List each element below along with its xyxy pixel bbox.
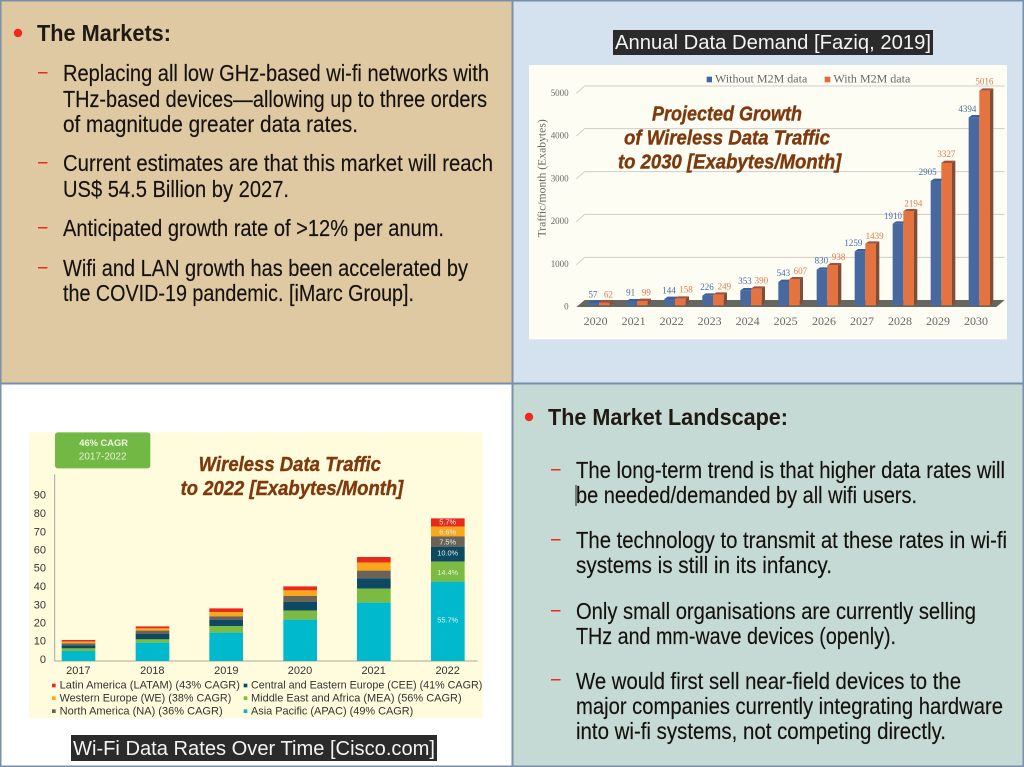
x axis labels: 2019 (214, 665, 239, 677)
percentage labels: 2022 bar: 7.5% (439, 537, 456, 546)
data labels: with M2M data: 1439 (866, 231, 884, 241)
x axis labels: 2021 (361, 665, 386, 677)
data labels: without M2M data: 4394 (958, 104, 977, 114)
bullet: the market landscape (525, 413, 533, 421)
percentage labels: 2022 bar: 10.0% (437, 549, 459, 558)
text block: landscape list: We would first sell near-field devices to the (576, 668, 961, 694)
x axis labels: 2023 (698, 314, 722, 328)
panel: wi-fi data rates (1, 384, 512, 766)
data labels: without M2M data: 830 (815, 256, 829, 266)
data labels: with M2M data: 158 (679, 285, 693, 295)
data labels: with M2M data: 607 (794, 266, 808, 276)
data labels: with M2M data: 938 (832, 252, 846, 262)
legend: Without M2M data (715, 74, 807, 86)
x axis labels: 2022 (660, 314, 684, 328)
caption: annual data demand: Annual Data Demand [Faziq, 2019] (615, 32, 931, 54)
y axis labels: 3000 (551, 173, 569, 183)
y axis labels: 80 (34, 508, 46, 520)
text block: market list: the COVID-19 pandemic. [iMarc Group]. (63, 280, 414, 306)
data labels: with M2M data: 62 (604, 289, 613, 299)
y axis labels: 1000 (551, 259, 569, 269)
badge: 46% CAGR: 2017-2022 (79, 451, 127, 462)
data labels: with M2M data: 99 (642, 288, 651, 298)
badge: 46% CAGR (55, 432, 150, 468)
text block: landscape list: be needed/demanded by all wifi users. (576, 482, 917, 508)
legend: Central and Eastern Europe (CEE) (41% CAGR) (251, 680, 482, 692)
y axis labels: 20 (34, 617, 46, 629)
bars: without M2M data (588, 115, 983, 305)
data labels: without M2M data (589, 104, 977, 299)
caption: wi-fi data rates: Wi-Fi Data Rates Over Time [Cisco.com] (73, 738, 435, 760)
text block: landscape list: THz and mm-wave devices (openly). (576, 623, 896, 649)
data labels: with M2M data (604, 77, 994, 299)
x axis labels: 2022 (435, 665, 460, 677)
data labels: with M2M data: 249 (718, 282, 732, 292)
data labels: with M2M data: 390 (755, 275, 769, 285)
x axis labels: 2028 (888, 314, 912, 328)
x axis labels: 2027 (850, 314, 874, 328)
data labels: without M2M data: 144 (662, 285, 676, 295)
y axis labels (34, 490, 46, 666)
text block: landscape list: systems is still in its infancy. (576, 552, 832, 578)
bars: with M2M data (599, 88, 993, 305)
x axis labels (584, 314, 988, 328)
x axis labels: 2018 (140, 665, 165, 677)
data labels: without M2M data: 543 (777, 268, 791, 278)
text block: landscape list (551, 457, 1007, 744)
legend: With M2M data (833, 74, 910, 86)
y axis labels: 40 (34, 581, 46, 593)
text block: market list: Anticipated growth rate of >12% per anum. (63, 215, 444, 241)
percentage labels: 2022 bar: 14.4% (437, 568, 459, 577)
y axis labels: 30 (34, 599, 46, 611)
chart title (181, 454, 405, 500)
y axis title: Traffic/month (Exabytes) (536, 119, 549, 237)
panel: annual data demand (513, 1, 1023, 383)
x axis labels: 2017 (66, 665, 91, 677)
data labels: without M2M data: 2905 (919, 167, 937, 177)
data labels: without M2M data: 91 (626, 288, 635, 298)
x axis labels: 2030 (964, 314, 988, 328)
data labels: without M2M data: 57 (589, 289, 598, 299)
percentage labels: 2022 bar: 5.7% (439, 518, 456, 527)
legend: Asia Pacific (APAC) (49% CAGR) (251, 705, 413, 717)
heading: the market landscape: The Market Landscape: (548, 404, 788, 430)
text block: landscape list: into wi-fi systems, not competing directly. (576, 718, 946, 744)
chart title: to 2030 [Exabytes/Month] (618, 152, 843, 174)
y axis labels: 5000 (551, 88, 569, 98)
chart title: of Wireless Data Traffic (624, 128, 830, 150)
badge: 46% CAGR: 46% CAGR (79, 438, 128, 448)
panel: the market landscape (513, 384, 1023, 766)
legend: North America (NA) (36% CAGR) (60, 705, 223, 717)
y axis labels: 4000 (551, 131, 569, 141)
data labels: without M2M data: 353 (738, 276, 752, 286)
text block: market list: Wifi and LAN growth has been accelerated by (63, 255, 468, 281)
y axis labels (551, 88, 569, 312)
text block: market list (38, 60, 493, 306)
legend: Western Europe (WE) (38% CAGR) (60, 692, 231, 704)
y axis labels: 10 (34, 636, 46, 648)
x axis labels: 2021 (622, 314, 646, 328)
chart: projected growth bar chart (529, 65, 1007, 339)
y axis labels: 60 (34, 544, 46, 556)
x axis labels (66, 665, 460, 677)
y axis labels: 70 (34, 526, 46, 538)
panel: the markets (1, 1, 512, 383)
data labels: without M2M data: 1910 (884, 211, 902, 221)
x axis labels: 2024 (736, 314, 760, 328)
x axis labels: 2025 (774, 314, 798, 328)
text block: market list: US$ 54.5 Billion by 2027. (63, 176, 289, 202)
chart title: Projected Growth (652, 104, 802, 126)
text block: market list: Replacing all low GHz-based wi-fi networks with (63, 60, 489, 86)
legend (707, 74, 910, 86)
x axis labels: 2020 (288, 665, 312, 677)
x axis labels: 2029 (926, 314, 950, 328)
text block: landscape list: Only small organisations are currently selling (576, 598, 976, 624)
chart title (618, 104, 843, 174)
y axis labels: 2000 (551, 216, 569, 226)
heading: the markets: The Markets: (37, 20, 171, 46)
x axis labels: 2020 (584, 314, 608, 328)
percentage labels: 2022 bar (437, 518, 459, 624)
chart title: to 2022 [Exabytes/Month] (181, 478, 405, 500)
y axis labels: 0 (40, 654, 46, 666)
stacked bars (62, 518, 465, 661)
text block: market list: Current estimates are that this market will reach (63, 150, 493, 176)
chart title: Wireless Data Traffic (199, 454, 381, 476)
legend (52, 680, 482, 717)
data labels: with M2M data: 2194 (904, 198, 923, 208)
text block: market list: THz-based devices—allowing up to three orders (63, 86, 487, 112)
y axis labels: 90 (34, 490, 46, 502)
x axis labels: 2026 (812, 314, 836, 328)
legend: Latin America (LATAM) (43% CAGR) (60, 680, 240, 692)
data labels: with M2M data: 3327 (937, 149, 956, 159)
y axis labels: 50 (34, 563, 46, 575)
data labels: without M2M data: 226 (700, 282, 714, 292)
y axis labels: 0 (564, 302, 569, 312)
chart: wireless data traffic stacked bars (29, 432, 483, 718)
percentage labels: 2022 bar: 6.6% (439, 527, 456, 536)
text block: market list: of magnitude greater data rates. (63, 111, 358, 137)
data labels: with M2M data: 5016 (975, 77, 994, 87)
percentage labels: 2022 bar: 55.7% (437, 615, 459, 624)
bullet: the markets (14, 29, 22, 37)
legend: Middle East and Africa (MEA) (56% CAGR) (251, 692, 462, 704)
data labels: without M2M data: 1259 (844, 238, 863, 248)
